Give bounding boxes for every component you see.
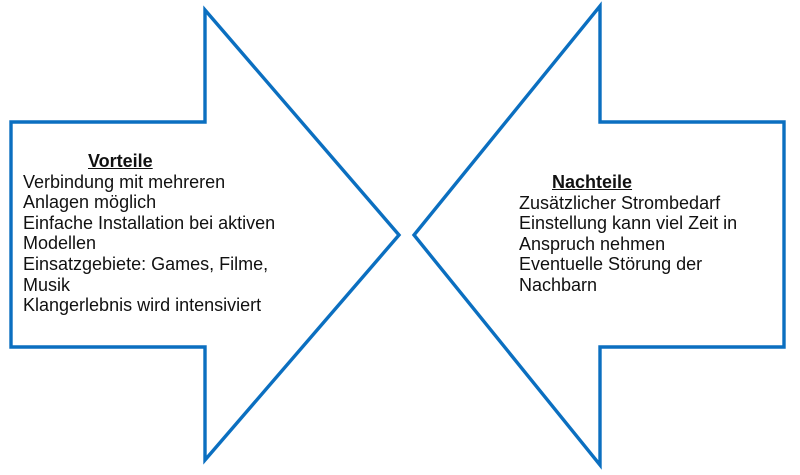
list: Vorteile items: Einsatzgebiete: Games, Filme, xyxy=(23,254,268,274)
list: Vorteile items: Verbindung mit mehreren xyxy=(23,172,225,192)
list: Nachteile items: Einstellung kann viel Zeit in xyxy=(519,213,737,233)
list: Nachteile items: Zusätzlicher Strombedarf xyxy=(519,193,720,213)
list: Nachteile items: Eventuelle Störung der xyxy=(519,254,702,274)
list: Vorteile items: Einfache Installation bei aktiven xyxy=(23,213,275,233)
heading: Vorteile: Vorteile xyxy=(88,151,153,171)
list: Nachteile items xyxy=(519,193,737,295)
text block: Nachteile xyxy=(519,172,737,295)
list: Vorteile items: Anlagen möglich xyxy=(23,192,156,212)
list: Vorteile items: Modellen xyxy=(23,233,96,253)
list: Nachteile items: Nachbarn xyxy=(519,275,597,295)
list: Vorteile items: Musik xyxy=(23,275,70,295)
heading: Nachteile: Nachteile xyxy=(552,172,632,192)
text block: Vorteile xyxy=(23,151,275,315)
left arrow xyxy=(11,10,399,460)
list: Nachteile items: Anspruch nehmen xyxy=(519,234,665,254)
right arrow xyxy=(414,6,784,465)
list: Vorteile items: Klangerlebnis wird intensiviert xyxy=(23,295,261,315)
list: Vorteile items xyxy=(23,172,275,315)
